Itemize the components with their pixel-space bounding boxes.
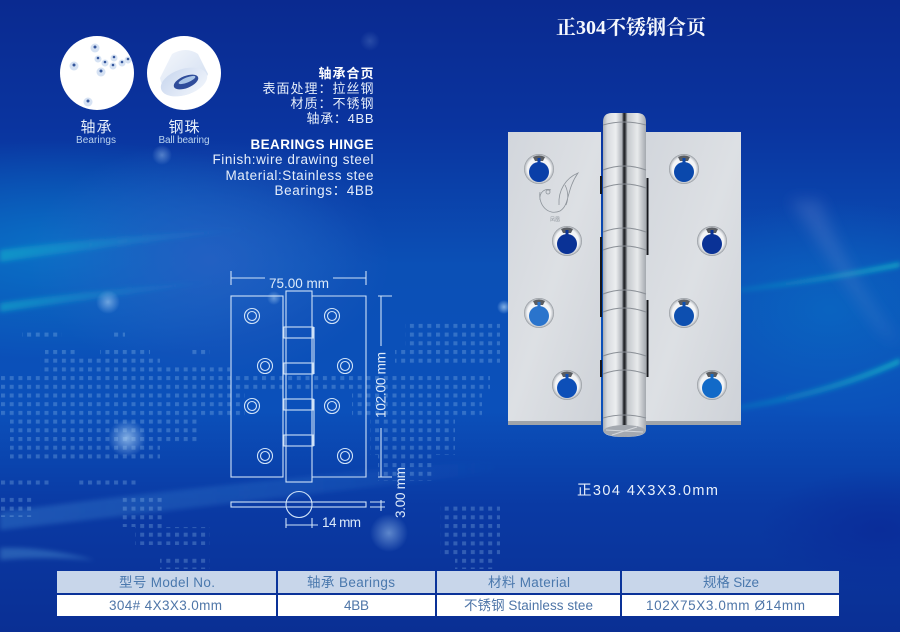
text block: chinese specification: 轴承合页 xyxy=(318,66,374,81)
right leaf xyxy=(646,132,741,425)
label: bearings xyxy=(76,119,116,146)
logo: 凤凰 xyxy=(550,217,560,223)
hinge barrel xyxy=(601,113,648,437)
text block: english specification: Finish:wire drawing steel xyxy=(212,152,374,167)
text block: english specification: Material:Stainless stee xyxy=(226,168,374,183)
table data row: 304# 4X3X3.0mm xyxy=(109,598,222,613)
left leaf xyxy=(508,132,601,425)
screw holes xyxy=(524,154,727,400)
table data row xyxy=(57,595,839,616)
table header row: 轴承 Bearings xyxy=(307,575,395,590)
text block: english specification xyxy=(212,137,374,198)
dimension labels: 102.00 mm xyxy=(374,352,388,418)
label: bearings: 轴承 xyxy=(80,119,112,136)
label: ball bearing xyxy=(158,119,210,146)
title: 正304不锈钢合页 xyxy=(556,16,706,39)
text block: chinese specification: 表面处理：拉丝钢 xyxy=(262,81,374,96)
logo xyxy=(540,173,578,223)
label: ball bearing: Ball bearing xyxy=(158,135,210,146)
label: bearings: Bearings xyxy=(76,135,116,146)
icon: ball bearing xyxy=(147,36,221,110)
icon: bearings balls xyxy=(60,36,134,110)
dimension labels: 3.00 mm xyxy=(393,467,408,518)
table data row: 不锈钢 Stainless stee xyxy=(464,598,593,613)
text block: english specification: Bearings：4BB xyxy=(274,183,374,198)
text block: english specification: BEARINGS HINGE xyxy=(250,137,374,152)
product caption: 正304 4X3X3.0mm xyxy=(577,483,718,499)
table header row: 型号 Model No. xyxy=(119,575,215,590)
dimension labels: 14 mm xyxy=(322,515,361,530)
table data row: 102X75X3.0mm Ø14mm xyxy=(646,598,805,613)
label: ball bearing: 钢珠 xyxy=(168,119,200,136)
text block: chinese specification: 轴承：4BB xyxy=(306,111,374,126)
table header row: 规格 Size xyxy=(703,575,759,590)
hinge photo xyxy=(508,113,741,437)
text block: chinese specification xyxy=(262,66,374,126)
table header row xyxy=(57,571,839,593)
dimension labels: 75.00 mm xyxy=(269,276,329,291)
dimension labels xyxy=(269,276,408,530)
table data row: 4BB xyxy=(344,598,369,613)
table header row: 材料 Material xyxy=(488,575,570,590)
text block: chinese specification: 材质：不锈钢 xyxy=(290,96,374,111)
spec table xyxy=(57,571,839,616)
technical drawing xyxy=(231,271,392,528)
